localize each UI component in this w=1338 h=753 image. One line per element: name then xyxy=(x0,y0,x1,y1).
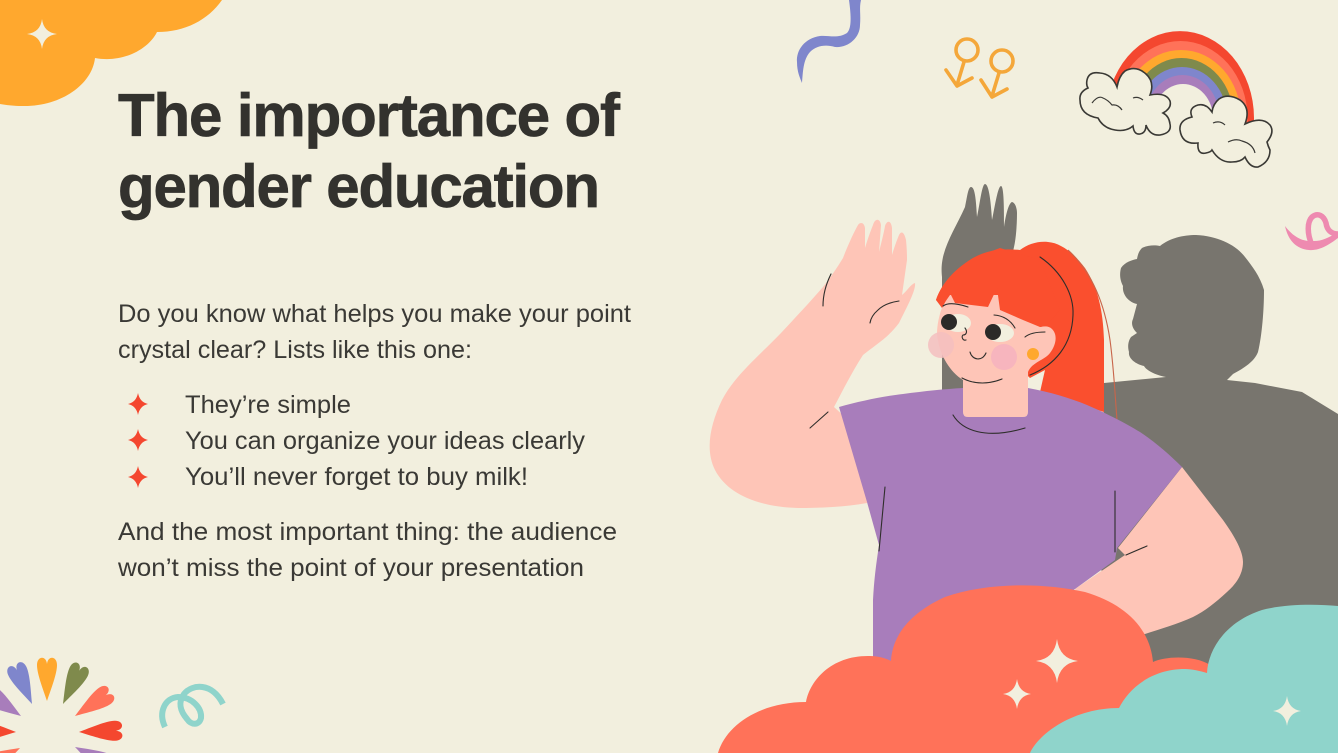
text block: closing: And the most important thing: the audience xyxy=(118,518,617,546)
icon: pink squiggle xyxy=(1285,215,1338,250)
illustration: shadow person xyxy=(942,184,1338,680)
bullet list: You can organize your ideas clearly xyxy=(185,427,586,455)
icon: teal squiggle xyxy=(162,687,223,727)
text block: intro: crystal clear? Lists like this one: xyxy=(118,336,472,364)
bullet list xyxy=(128,391,586,491)
bullet list: They’re simple xyxy=(185,391,351,419)
text block: intro: Do you know what helps you make your point xyxy=(118,300,631,328)
right arm xyxy=(1075,467,1243,640)
hair xyxy=(936,242,1104,412)
fringe xyxy=(936,248,1060,327)
icon: orange cloud with sparkle xyxy=(0,0,222,106)
neck and face xyxy=(937,295,1056,417)
line details xyxy=(810,257,1147,555)
icon: heart burst xyxy=(0,658,123,753)
earring xyxy=(1027,348,1039,360)
bullet list: You’ll never forget to buy milk! xyxy=(185,463,528,491)
shirt xyxy=(839,388,1182,665)
illustration: woman waving xyxy=(710,220,1243,665)
icon: coral cloud with sparkles xyxy=(718,585,1210,753)
icon: teal cloud with sparkle xyxy=(1030,605,1338,753)
icon: rainbow with clouds xyxy=(1080,31,1272,167)
cheeks xyxy=(928,332,1017,370)
text block: closing: won’t miss the point of your presentation xyxy=(117,554,584,582)
icon: blue squiggle xyxy=(797,0,861,83)
eyes xyxy=(941,314,1014,342)
text block: closing xyxy=(117,518,617,582)
icon: gender symbols xyxy=(946,39,1013,97)
hair strand xyxy=(1068,250,1117,420)
title xyxy=(118,82,621,220)
title: The importance of xyxy=(118,82,621,149)
raised arm xyxy=(710,220,915,508)
text block: intro xyxy=(118,300,631,364)
title: gender education xyxy=(118,153,600,220)
